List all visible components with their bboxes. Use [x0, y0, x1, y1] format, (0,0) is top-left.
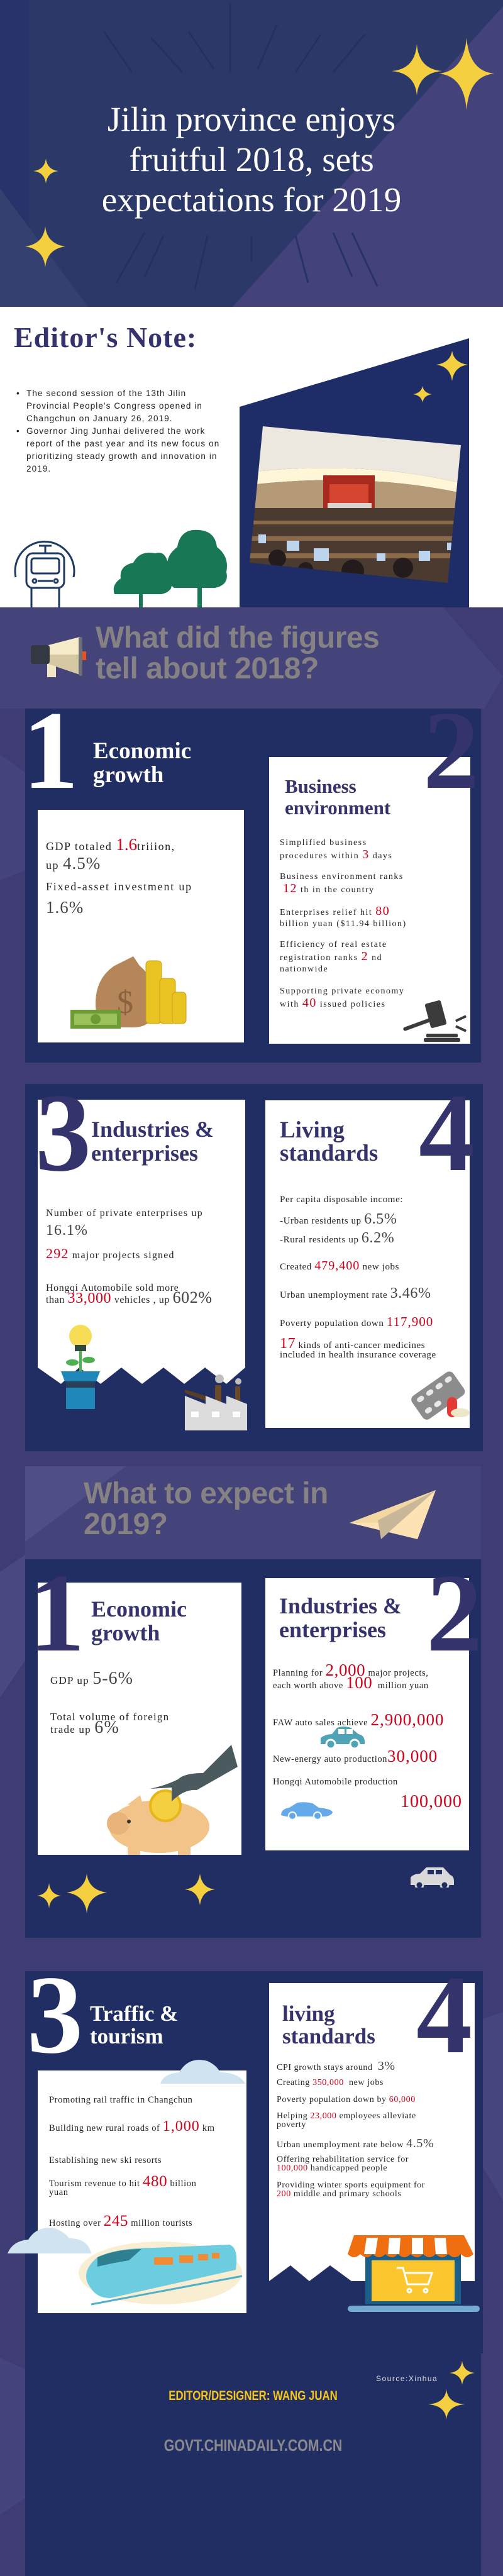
card: economic growth: [38, 810, 244, 1042]
icon: footer stars: [428, 2361, 475, 2419]
text: Providing winter sports equipment for: [277, 2181, 425, 2190]
text: Urban unemployment rate below 4.5%: [277, 2137, 434, 2150]
card: 2019 industries: Planning for 2,000 major projects,: [273, 1661, 428, 1679]
card: 2019 industries: each worth above 100 million yuan: [273, 1673, 429, 1692]
text: Offering rehabilitation service for: [277, 2155, 409, 2164]
number 4: 4: [419, 1070, 475, 1195]
text: than 33,000 vehicles , up 602%: [46, 1288, 213, 1307]
panel: 2019 economic & industries: [25, 1559, 481, 1938]
card: 2019 economic growth: trade up 6%: [50, 1718, 119, 1737]
heading: economic growth: Economic: [93, 738, 191, 764]
icon: trees: [113, 529, 227, 607]
card: business environment: Simplified business: [280, 838, 367, 848]
card: 2019 industries: Industries &: [279, 1593, 402, 1618]
text: source: Source:Xinhua: [376, 2374, 438, 2383]
text block: bullets: The second session of the 13th Jilin Provincial People's Congress opened in Changchun on January 26, 2019.: [26, 389, 202, 423]
heading: economic growth: [93, 738, 191, 788]
card: business environment: billion yuan ($11.94 billion): [280, 919, 407, 929]
card: 2019 economic growth: Economic: [91, 1596, 187, 1622]
icon: money: $: [117, 985, 133, 1020]
title: expectations for 2019: [102, 180, 401, 219]
text: CPI growth stays around 3%: [277, 2059, 395, 2073]
text block: bullets: Governor Jing Junhai delivered the work report of the past year and its new focus on prioritizing steady growth and innovation in 2019.: [26, 426, 219, 473]
text: 200 middle and primary schools: [277, 2189, 401, 2199]
text: standards: [282, 2024, 375, 2048]
number 3 (2019): 3: [27, 1952, 83, 2077]
card: living standards: Per capita disposable income:: [280, 1195, 403, 1205]
panel: 2019 traffic & living: [25, 1971, 483, 2353]
card: business environment: Business: [285, 775, 357, 797]
card: 2019 industries: FAW auto sales achieve 2,900,000: [273, 1710, 444, 1729]
section band: 2018: [0, 607, 503, 709]
icon: factory: [185, 1374, 247, 1430]
heading: economic growth: growth: [93, 762, 163, 788]
icon: blue car: [281, 1802, 333, 1819]
card: living standards: standards: [280, 1141, 378, 1166]
text: Poverty population down by 60,000: [277, 2095, 416, 2104]
card: traffic & tourism: Building new rural roads of 1,000 km: [49, 2118, 215, 2135]
card: living standards: included in health insurance coverage: [280, 1350, 436, 1360]
card: economic growth: GDP totaled 1.6triiion,: [46, 835, 175, 854]
text: editor credit: EDITOR/DESIGNER: WANG JUAN: [169, 2389, 338, 2403]
icon: megaphone: [31, 637, 86, 677]
card: 2019 economic growth: Total volume of foreign: [50, 1711, 169, 1723]
number 3: 3: [35, 1070, 91, 1195]
card: economic growth: up 4.5%: [46, 854, 101, 873]
card: traffic & tourism: Establishing new ski resorts: [49, 2155, 162, 2165]
footer: [25, 2353, 481, 2576]
photo panel: [240, 338, 469, 607]
card: business environment: procedures within 3 days: [280, 848, 392, 861]
card: living standards: Urban unemployment rate 3.46%: [280, 1285, 431, 1302]
card: living standards: [265, 1100, 470, 1428]
card: living standards: Poverty population down 117,900: [280, 1314, 433, 1329]
card: living standards: 17 kinds of anti-cancer medicines: [280, 1335, 425, 1352]
text: 16.1%: [46, 1222, 88, 1239]
heading: what to expect: What to expect in: [84, 1477, 328, 1510]
card: economic growth: Fixed-asset investment up: [46, 880, 192, 893]
card: traffic & tourism: Hosting over 245 million tourists: [49, 2213, 192, 2230]
heading: editor's note: Editor's Note:: [14, 321, 197, 353]
text: Hongqi Automobile sold more: [46, 1283, 179, 1293]
card: business environment: registration ranks 2 nd: [280, 949, 382, 963]
card: business environment: Business environment ranks: [280, 872, 404, 882]
heading: what to expect: [84, 1477, 328, 1541]
heading: what did the figures: tell about 2018?: [96, 652, 319, 685]
header: [0, 0, 503, 307]
card: living standards: -Rural residents up 6.2%: [280, 1230, 394, 1246]
text: 292 major projects signed: [46, 1246, 175, 1261]
text: Number of private enterprises up: [46, 1208, 203, 1219]
icon: stars middle: [37, 1874, 215, 1913]
icon: piggy bank: [107, 1745, 238, 1855]
number 2: 2: [423, 688, 479, 812]
card: business environment: Efficiency of real estate: [280, 940, 387, 949]
heading: what did the figures: [96, 621, 379, 685]
card: business environment: [269, 757, 470, 1044]
icon: shop: [348, 2235, 480, 2312]
text block: bullets: •: [16, 426, 20, 436]
card: living standards: Created 479,400 new jobs: [280, 1259, 399, 1273]
title: Jilin province enjoys: [108, 100, 395, 138]
card: traffic & tourism: Tourism revenue to hit 480 billion: [49, 2173, 197, 2190]
card: business environment: environment: [285, 797, 390, 819]
number 2 (2019): 2: [426, 1551, 482, 1675]
text: Creating 350,000 new jobs: [277, 2078, 384, 2087]
card: 2019 industries: New-energy auto production30,000: [273, 1747, 438, 1766]
icon: money: [70, 956, 186, 1029]
card: business environment: Enterprises relief hit 80: [280, 904, 390, 918]
icon: lightbulb plant: [61, 1325, 100, 1409]
icon: train: [79, 2242, 243, 2305]
card: traffic & tourism: Promoting rail traffic in Changchun: [49, 2095, 193, 2105]
text: Helping 23,000 employees alleviate: [277, 2111, 416, 2121]
icon: clouds: [8, 2060, 245, 2253]
card: living standards 2019: [269, 1983, 475, 2281]
card: 2019 industries: enterprises: [279, 1617, 386, 1642]
card: 2019 economic growth: GDP up 5-6%: [50, 1669, 133, 1688]
card: 2019 industries: [265, 1578, 469, 1850]
heading: what to expect: 2019?: [84, 1508, 168, 1541]
text: poverty: [277, 2120, 306, 2130]
icon: pills: [411, 1371, 470, 1420]
card: 2019 industries: Hongqi Automobile production: [273, 1777, 398, 1787]
card: business environment: 12 th in the country: [283, 882, 375, 895]
card: business environment: nationwide: [280, 965, 328, 974]
number 1 (2019): 1: [29, 1551, 85, 1675]
panel: 2018 economic growth & business environment: [25, 709, 481, 1063]
card: traffic & tourism: yuan: [49, 2187, 69, 2197]
card: 2019 economic growth: growth: [91, 1620, 160, 1645]
heading: traffic & tourism: Traffic &: [90, 2001, 178, 2026]
card: business environment: Supporting private economy: [280, 987, 404, 996]
heading: traffic & tourism: tourism: [90, 2024, 163, 2048]
icon: car outline: [411, 1867, 454, 1888]
title: fruitful 2018, sets: [129, 140, 374, 179]
text: Industries &: [91, 1117, 214, 1142]
card: traffic & tourism: [38, 2070, 246, 2313]
panel: 2018 industries & living: [25, 1084, 483, 1451]
icon: stars header: [25, 38, 494, 267]
card: living standards: -Urban residents up 6.5%: [280, 1211, 397, 1227]
text: 100,000 handicapped people: [277, 2164, 387, 2173]
text: website: GOVT.CHINADAILY.COM.CN: [164, 2436, 342, 2455]
card: business environment: with 40 issued policies: [280, 996, 385, 1010]
card: living standards: Living: [280, 1117, 345, 1143]
card: economic growth: 1.6%: [46, 898, 84, 917]
icon: teal car: [321, 1727, 365, 1748]
heading: what did the figures: What did the figures: [96, 621, 379, 655]
number 1: 1: [23, 688, 79, 812]
icon: paper plane: [350, 1490, 436, 1539]
card: 2019 industries: 100,000: [401, 1792, 462, 1811]
heading: traffic & tourism: [90, 2001, 178, 2048]
text: enterprises: [91, 1141, 198, 1166]
text: living: [282, 2001, 335, 2026]
section band: 2019: [25, 1466, 481, 1559]
card: 2019 economic growth: [38, 1583, 241, 1855]
number 4 (2019): 4: [416, 1952, 472, 2077]
title: [102, 100, 401, 219]
icon: tram: [14, 541, 75, 607]
card: industries & enterprises: [38, 1100, 245, 1384]
text block: bullets: •: [16, 389, 20, 398]
panel: editor's note: [0, 307, 503, 607]
icon: gavel: [403, 1000, 467, 1042]
text block: bullets: [16, 389, 219, 473]
